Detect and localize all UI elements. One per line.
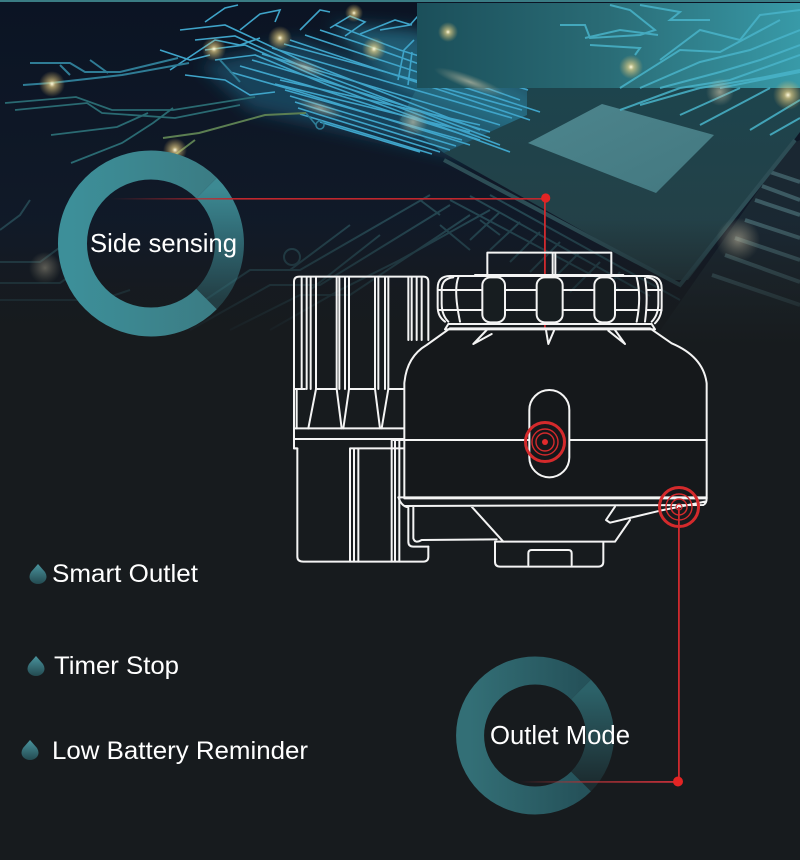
label: outlet mode: Outlet Mode [490, 722, 630, 750]
bottom fade [0, 220, 800, 345]
faint lower circuit traces [0, 195, 680, 330]
feature: low battery reminder: Low Battery Reminder [52, 737, 308, 765]
device line drawing [294, 253, 707, 567]
right side lower stripes [650, 140, 800, 345]
leader dot [541, 193, 550, 203]
target: outlet mode [660, 488, 698, 526]
overlay circuit traces [560, 5, 800, 135]
red line: outlet mode leader [520, 507, 683, 786]
left circuit traces [23, 58, 240, 85]
feature: timer stop: Timer Stop [54, 652, 179, 680]
sensor slot [529, 390, 569, 477]
bright circuit trace bundles [160, 5, 540, 154]
glow lights [29, 4, 800, 284]
feature: smart outlet: Smart Outlet [52, 560, 198, 588]
label: side sensing: Side sensing [90, 228, 237, 258]
red line: side sensing leader [110, 193, 550, 441]
teal overlay banner [417, 3, 800, 88]
main body [404, 328, 707, 498]
lower body and spout [398, 497, 707, 567]
leader dot [673, 776, 683, 786]
target: side sensing [526, 422, 564, 462]
ring: outlet mode [470, 670, 600, 800]
chip top face [528, 104, 714, 193]
body seam lines [393, 437, 707, 443]
chip package [400, 88, 800, 285]
ring: side sensing [72, 165, 229, 322]
circuit board photo backdrop [0, 0, 800, 345]
feature list [22, 560, 308, 765]
top cap [438, 253, 662, 344]
olive trace [163, 113, 306, 155]
filter housing [294, 277, 428, 562]
glowing band behind traces [200, 25, 560, 165]
